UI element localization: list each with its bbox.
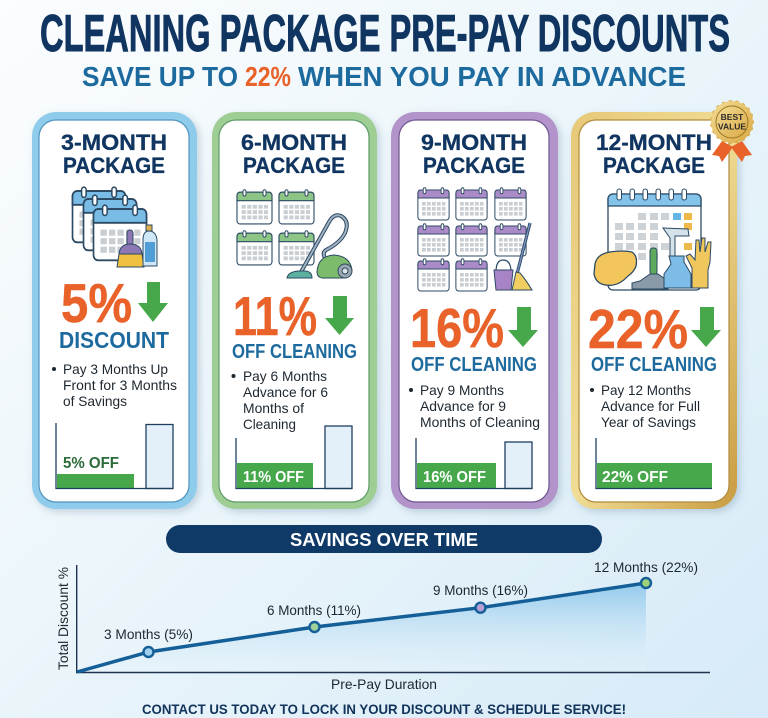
discount value: 16%	[410, 297, 504, 359]
bar chart: 5% OFF	[63, 455, 119, 472]
bar chart	[56, 423, 173, 488]
bullet text: Months of	[243, 400, 304, 416]
discount label: OFF CLEANING	[591, 354, 717, 376]
heading	[596, 130, 712, 178]
icon: down arrow	[691, 307, 721, 347]
discount value: 5%	[61, 272, 132, 334]
bar chart	[416, 438, 532, 488]
bullet text	[232, 368, 328, 432]
icon: calendar with cleaning supplies	[594, 189, 711, 290]
badge: best value	[711, 101, 753, 162]
bullet text: Pay 3 Months Up	[63, 361, 168, 377]
badge: best value: VALUE	[718, 122, 746, 132]
bullet text: Pay 9 Months	[420, 382, 504, 398]
y axis label: Total Discount %	[55, 567, 71, 670]
bullet text: Pay 12 Months	[601, 382, 691, 398]
bar chart: 16% OFF	[423, 469, 486, 486]
heading	[61, 130, 167, 178]
bullet text: Months of Cleaning	[420, 414, 540, 430]
heading: PACKAGE	[63, 153, 165, 178]
bullet text: Pay 6 Months	[243, 368, 327, 384]
icon: calendars with brush and bottle	[73, 187, 157, 267]
heading: PACKAGE	[243, 153, 345, 178]
discount label: OFF CLEANING	[232, 341, 357, 363]
subtitle: 22%	[245, 61, 291, 92]
heading: 6-MONTH	[241, 130, 347, 155]
panel: 9-month package	[391, 112, 558, 509]
bullet text: Year of Savings	[601, 414, 696, 430]
data label: 6 months: 6 Months (11%)	[267, 602, 361, 618]
x axis label: Pre-Pay Duration	[331, 676, 437, 692]
point: 6 months	[310, 622, 320, 632]
bullet text: Front for 3 Months	[63, 377, 177, 393]
panel: 3-month package	[32, 112, 197, 509]
footer call to action: CONTACT US TODAY TO LOCK IN YOUR DISCOUNT & SCHEDULE SERVICE!	[142, 701, 626, 717]
discount value: 22%	[588, 298, 688, 360]
bar chart: 11% OFF	[243, 469, 304, 486]
subtitle: SAVE UP TO	[82, 61, 238, 92]
point: 3 months	[144, 647, 154, 657]
bar chart	[596, 438, 712, 488]
bullet text: Advance for 6	[243, 384, 328, 400]
point: 12 months	[641, 578, 651, 588]
bullet text	[590, 382, 700, 430]
bullet text: Advance for Full	[601, 398, 700, 414]
heading: 9-MONTH	[421, 130, 527, 155]
icon: down arrow	[325, 296, 354, 335]
bullet text: of Savings	[63, 393, 127, 409]
bar chart: 22% OFF	[602, 469, 668, 486]
panel: 6-month package	[212, 112, 377, 509]
bar chart	[236, 426, 352, 488]
discount value: 11%	[233, 285, 317, 347]
icon: down arrow	[138, 282, 168, 322]
discount label: DISCOUNT	[59, 327, 169, 353]
badge: best value: BEST	[721, 112, 744, 122]
discount label: OFF CLEANING	[411, 354, 537, 376]
heading: 12-MONTH	[596, 130, 712, 155]
heading: PACKAGE	[603, 153, 705, 178]
icon: calendars with vacuum	[237, 190, 352, 278]
panel: 12-month package	[571, 101, 753, 509]
heading: 3-MONTH	[61, 130, 167, 155]
data label: 3 months: 3 Months (5%)	[104, 626, 193, 642]
heading: savings over time	[166, 525, 602, 553]
data label: 9 months: 9 Months (16%)	[433, 582, 528, 598]
heading: savings over time: SAVINGS OVER TIME	[290, 530, 478, 550]
icon: down arrow	[508, 307, 538, 347]
heading	[421, 130, 527, 178]
subtitle	[82, 61, 686, 92]
point: 9 months	[476, 603, 486, 613]
bullet text	[52, 361, 177, 409]
heading: PACKAGE	[423, 153, 525, 178]
heading	[241, 130, 347, 178]
bullet text: Cleaning	[243, 416, 296, 432]
bullet text	[409, 382, 540, 430]
icon: calendars with mop and bucket	[418, 188, 532, 291]
line chart: savings over time	[55, 559, 710, 692]
bullet text: Advance for 9	[420, 398, 506, 414]
subtitle: WHEN YOU PAY IN ADVANCE	[298, 61, 686, 92]
data label: 12 months: 12 Months (22%)	[594, 559, 698, 575]
